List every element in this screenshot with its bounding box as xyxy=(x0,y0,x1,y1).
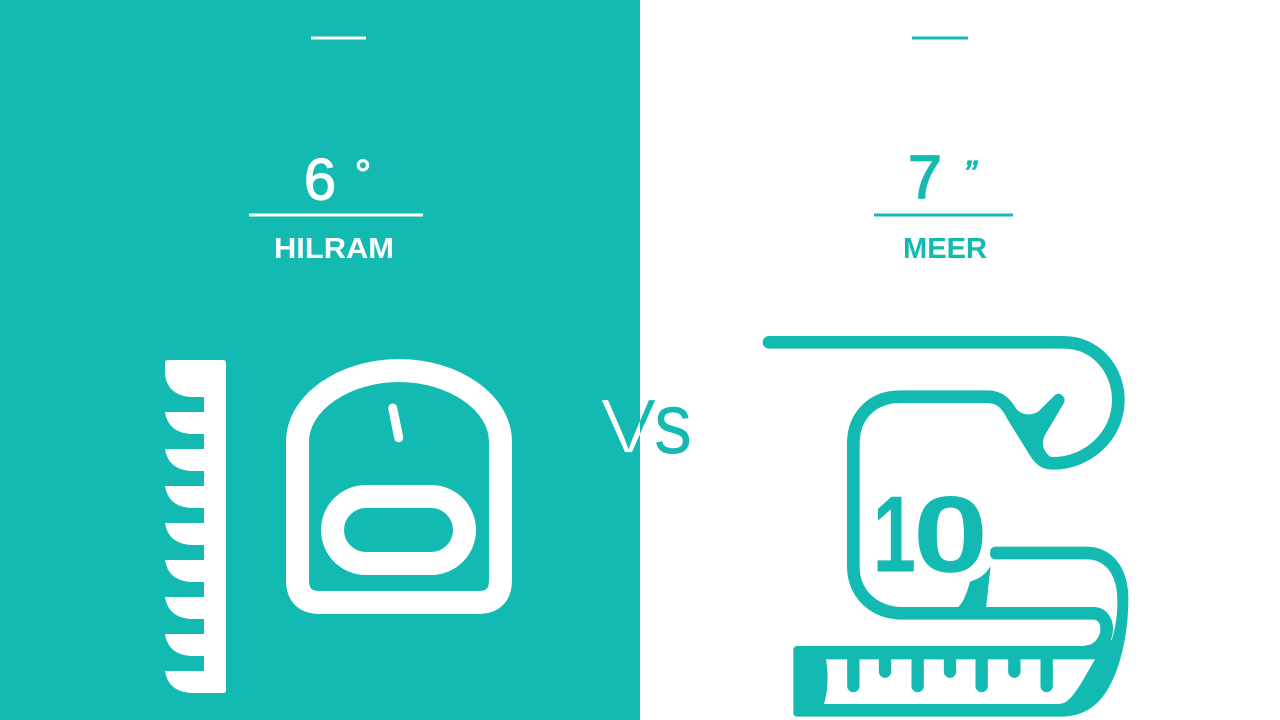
panel: right white background xyxy=(640,0,1280,720)
scale needle xyxy=(393,408,399,438)
panel: left teal background xyxy=(0,0,640,720)
right value: 7: 7 xyxy=(908,143,942,211)
vs label: V xyxy=(600,382,657,470)
ruler ticks xyxy=(853,657,1047,686)
icon: measuring tape xyxy=(769,342,1128,717)
left value: 6 degrees: 6 xyxy=(304,148,336,212)
left value: 6 degrees xyxy=(304,148,371,212)
tape curl and ruler strip xyxy=(793,547,1128,717)
right heading rule xyxy=(874,214,1013,216)
right value: 7 xyxy=(908,143,979,211)
tape joint xyxy=(957,566,991,608)
tape ribbon xyxy=(769,342,1118,652)
tape value: 1 xyxy=(873,474,916,595)
tape hook xyxy=(1012,394,1065,468)
vs label: s xyxy=(654,376,692,472)
left value: 6 degrees: ° xyxy=(355,151,371,197)
left label: HILRAM xyxy=(274,233,394,265)
right label: MEER xyxy=(903,233,987,265)
icon: vertical ruler xyxy=(165,360,226,693)
scale display xyxy=(332,496,464,564)
right top dash xyxy=(912,36,968,40)
vs label xyxy=(602,400,690,454)
vs label: V xyxy=(600,382,657,470)
right value: 7: ” xyxy=(964,154,979,196)
tape value xyxy=(873,474,988,595)
icon: weighing scale xyxy=(298,370,500,602)
tape value: 0 xyxy=(913,474,988,595)
left top dash xyxy=(311,36,366,40)
left heading rule xyxy=(249,214,423,216)
scale body xyxy=(298,370,500,602)
